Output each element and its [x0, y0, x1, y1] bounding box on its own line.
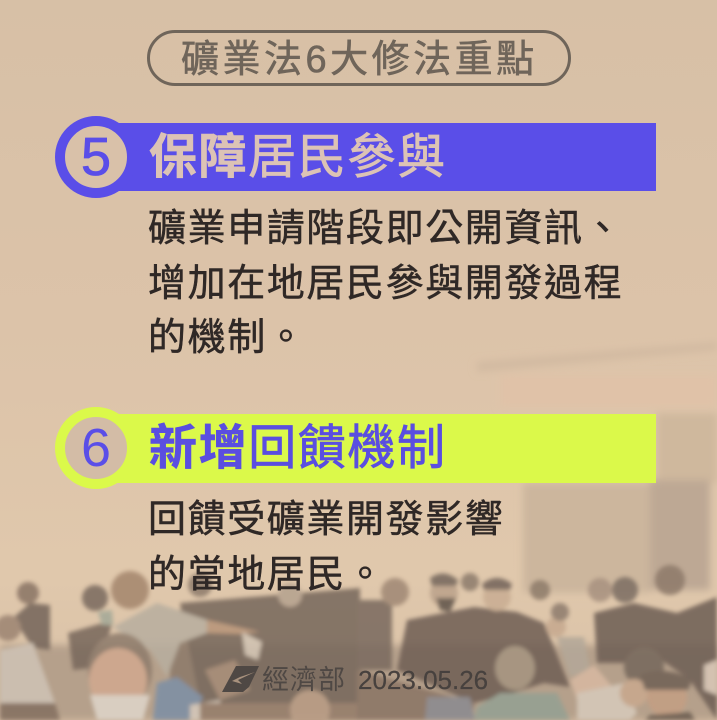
body text 5: 增加在地居民參與開發過程: [148, 262, 623, 304]
footer: [222, 665, 488, 695]
icon: ministry logo: [222, 666, 259, 692]
body text 6: [148, 499, 504, 596]
body text 6: 的當地居民。: [148, 554, 386, 596]
heading 5: 保障居民參與: [149, 131, 447, 184]
panel: item 5 heading band: [55, 116, 656, 198]
body text 5: 的機制。: [148, 317, 306, 359]
body text 5: 礦業申請階段即公開資訊、: [148, 208, 623, 250]
crowd figures, left: [170, 610, 360, 720]
band: [95, 414, 656, 483]
number badge 5: [55, 116, 137, 198]
panel: item 6 heading band: [55, 407, 656, 489]
crowd figures, right: [357, 600, 392, 670]
body text 5: [148, 208, 623, 359]
body text 6: 回饋受礦業開發影響: [148, 499, 504, 541]
date: 2023.05.26: [358, 665, 488, 695]
heading 6: 新增回饋機制: [149, 422, 447, 475]
title: 礦業法6大修法重點: [181, 39, 538, 81]
title pill: [147, 30, 571, 86]
band: [95, 123, 656, 191]
number badge 6: [55, 407, 137, 489]
ministry name: 經濟部: [262, 665, 346, 695]
number badge 5: 5: [81, 127, 111, 187]
number badge 6: 6: [81, 418, 111, 478]
